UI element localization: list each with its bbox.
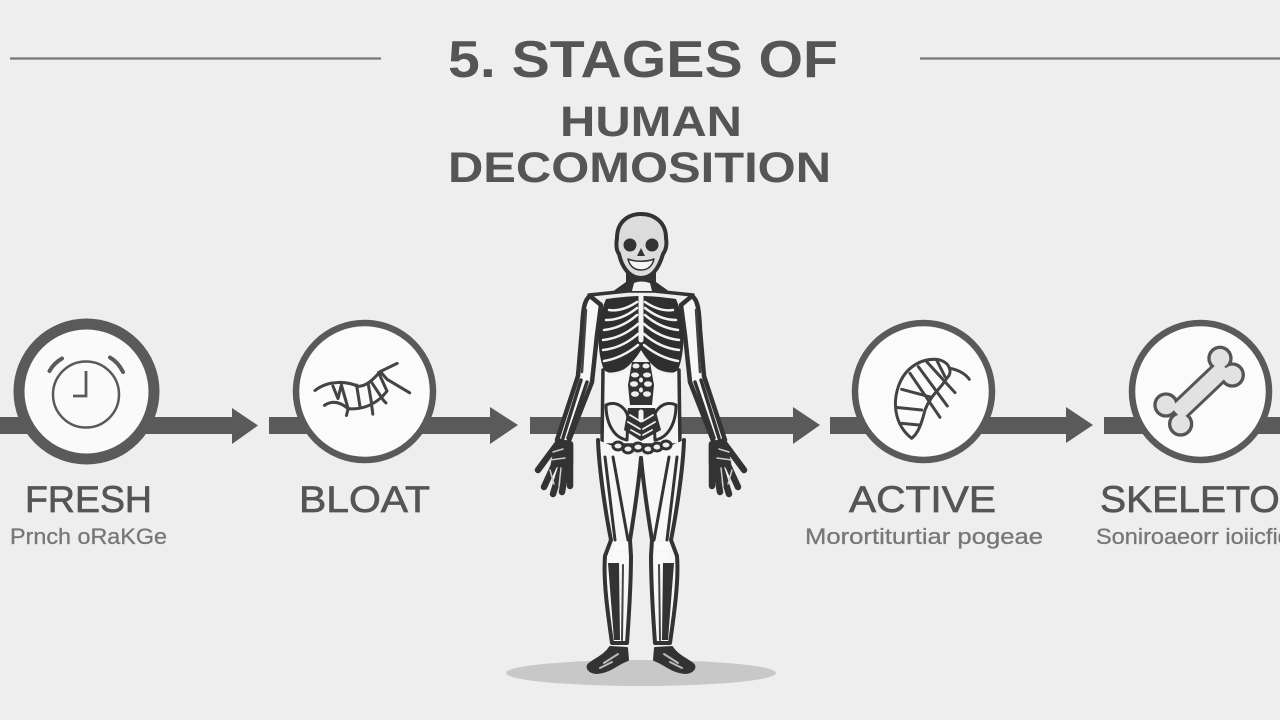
- icon: bone: [1132, 323, 1269, 460]
- caption: skeleton: Soniroaeorr ioiicfidi: [1096, 524, 1280, 549]
- sacrum: [624, 408, 661, 441]
- rib cage side: [599, 296, 641, 373]
- skeleton figure: [538, 214, 744, 673]
- arrow: active to skeleton stage: [830, 407, 1093, 443]
- stage: fresh: [10, 324, 167, 549]
- icon: maggot: [296, 323, 433, 460]
- neck: [612, 268, 670, 292]
- stage: bloat: [296, 323, 433, 520]
- label: bloat: BLOAT: [299, 479, 430, 520]
- caption: fresh: Prnch oRaKGe: [10, 524, 167, 549]
- skeleton side: right: [641, 296, 744, 673]
- title: DECOMOSITION: [448, 144, 831, 192]
- icon: larva: [855, 323, 992, 460]
- ground shadow: [506, 660, 776, 686]
- arm: [557, 296, 601, 443]
- torso: [602, 370, 680, 445]
- hand: [538, 443, 570, 494]
- hip bones: [613, 441, 671, 453]
- caption: active: Morortiturtiar pogeae: [805, 524, 1043, 549]
- arrow: bloat to skeleton: [269, 407, 518, 444]
- skull: [616, 214, 666, 278]
- arrow: into fresh: [0, 417, 30, 434]
- leg: [598, 440, 641, 643]
- foot: [588, 647, 628, 673]
- title: 5. STAGES OF: [448, 31, 838, 89]
- skeleton side: left: [538, 296, 641, 673]
- title: [448, 31, 838, 192]
- pelvis wing: [606, 403, 628, 440]
- arrow: exit from skeleton stage: [1104, 417, 1280, 434]
- arrow: skeleton to active: [530, 407, 820, 444]
- arrow: fresh to bloat: [140, 408, 258, 444]
- sternum: [638, 296, 644, 340]
- icon: alarm clock: [19, 324, 154, 459]
- stage: active: [805, 323, 1043, 549]
- spine: [628, 362, 654, 405]
- label: active: ACTIVE: [849, 479, 996, 520]
- label: fresh: FRESH: [25, 479, 152, 520]
- title: HUMAN: [560, 98, 742, 146]
- shoulder girdle: [589, 291, 693, 295]
- stage: skeleton: [1096, 323, 1280, 549]
